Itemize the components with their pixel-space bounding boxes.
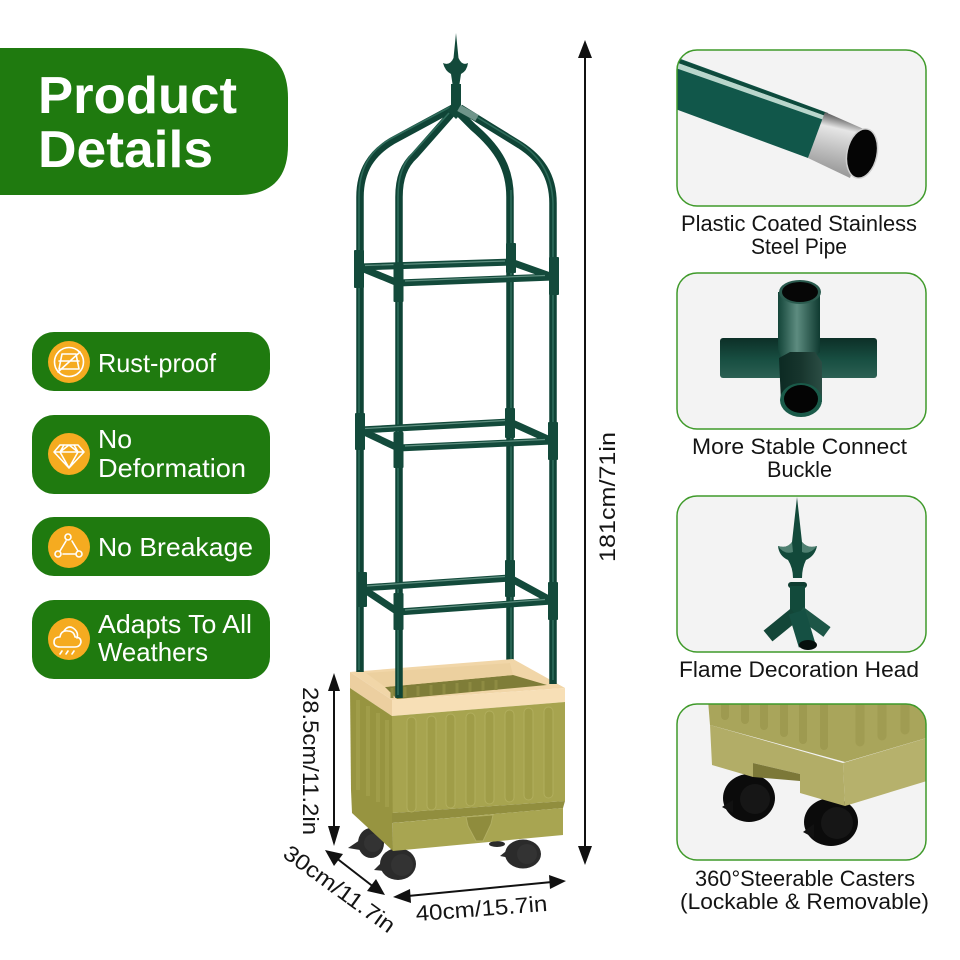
flame finial [443, 33, 468, 119]
panel: flame head [677, 496, 926, 652]
caption: buckle: Buckle [767, 457, 832, 482]
badge: adapts to all weathers [32, 600, 270, 679]
title banner: Product [38, 67, 237, 125]
caption: pipe: Steel Pipe [751, 234, 847, 259]
caption: pipe: Plastic Coated Stainless [681, 211, 917, 236]
caption: buckle: More Stable Connect [692, 434, 907, 459]
dimension: planter depth: 30cm/11.7in [279, 840, 400, 938]
caption: flame head: Flame Decoration Head [679, 657, 919, 682]
badge: no breakage [32, 517, 270, 576]
light connector arm at the apex [459, 108, 477, 118]
side ribs [358, 700, 387, 807]
back trellis pole [458, 112, 511, 668]
front ribs [407, 707, 553, 812]
caption: casters [680, 866, 929, 914]
panel: connector buckle [677, 273, 926, 429]
ring bars [359, 262, 553, 612]
title banner: Details [38, 121, 213, 179]
dimension: planter width: 40cm/15.7in [415, 891, 548, 926]
badge: adapts to all weathers: Weathers [98, 637, 208, 667]
caption: casters: 360°Steerable Casters [695, 866, 915, 891]
product: planter with trellis [348, 33, 565, 880]
dimension: planter height: 28.5cm/11.2in [298, 687, 323, 835]
front trellis frame [354, 33, 559, 698]
badge: no deformation [32, 415, 270, 494]
planter body [350, 688, 565, 851]
drainage hook [466, 815, 493, 841]
badge: no deformation: No [98, 424, 132, 454]
badge: adapts to all weathers: Adapts To All [98, 609, 252, 639]
dimension: planter height [298, 673, 340, 846]
title banner [0, 48, 288, 195]
caption: casters: (Lockable & Removable) [680, 889, 929, 914]
caption: buckle [692, 434, 907, 482]
planter rim and interior [350, 659, 565, 716]
caption: pipe [681, 211, 917, 259]
dimension: total height: 181cm/71in [595, 432, 620, 562]
panel: casters [677, 700, 930, 860]
badge: no deformation: Deformation [98, 453, 246, 483]
badge: no breakage: No Breakage [98, 532, 253, 562]
badge: rust-proof [32, 332, 270, 391]
dimension: planter width [393, 875, 566, 926]
casters [348, 828, 541, 880]
badge: rust-proof: Rust-proof [98, 348, 217, 378]
connectors [354, 243, 559, 630]
panel: coated steel pipe [670, 50, 926, 206]
dimension: total height [578, 40, 620, 865]
